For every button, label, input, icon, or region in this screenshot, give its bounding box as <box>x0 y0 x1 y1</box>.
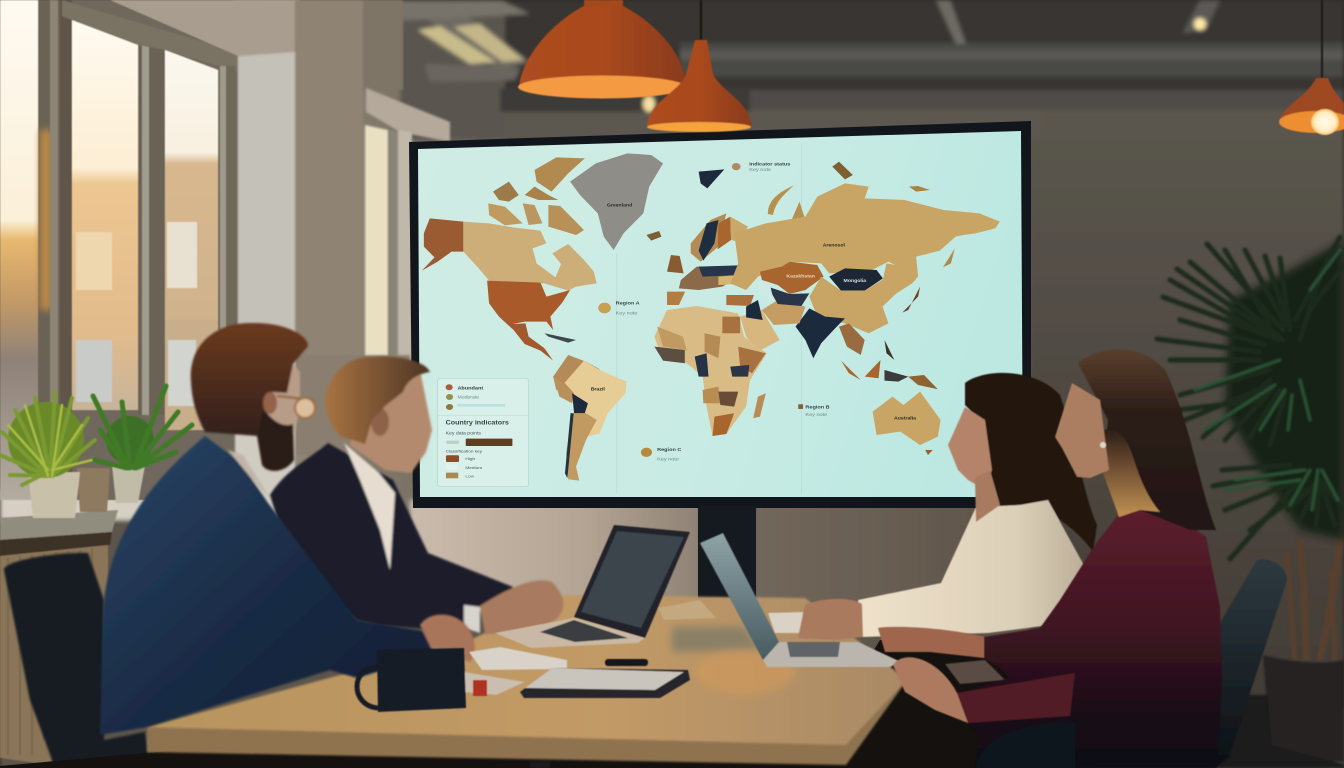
notebook <box>520 668 690 698</box>
hand: lower <box>893 657 968 723</box>
face <box>262 355 300 440</box>
lamp: large centre <box>518 0 686 98</box>
cream pot front <box>28 472 80 518</box>
woman with maroon sweater <box>878 349 1222 768</box>
display bezel <box>409 121 1031 508</box>
hair: blond lower strands <box>1103 429 1160 517</box>
table front edge <box>147 680 907 765</box>
screen <box>418 131 1023 497</box>
Greenland <box>570 153 663 250</box>
hair <box>191 323 308 436</box>
ceiling and ducts <box>302 0 1344 140</box>
document under mug <box>464 672 525 695</box>
coffee mug <box>357 648 466 712</box>
navy jacket <box>100 436 433 735</box>
pendant lamps <box>518 0 1344 135</box>
legend panel: Abundant <box>457 386 484 391</box>
window sill <box>0 510 118 540</box>
map callouts: Key note <box>657 457 679 462</box>
map callouts: Region A <box>616 301 640 306</box>
plant: large left <box>0 392 95 485</box>
ear <box>263 392 277 414</box>
lamp: small centre <box>647 0 752 132</box>
floor <box>1215 695 1344 768</box>
radiator <box>0 545 108 765</box>
pen <box>473 680 487 696</box>
left chair <box>4 553 150 768</box>
earring <box>1100 442 1106 448</box>
maroon sweater <box>957 510 1222 768</box>
Australia <box>873 392 941 445</box>
legend panel: Low <box>465 474 475 478</box>
face <box>948 407 992 490</box>
hair <box>1078 349 1216 530</box>
blouse lower <box>945 660 1005 684</box>
large wall display with world map <box>409 121 1031 598</box>
woman with cream blouse <box>798 373 1097 684</box>
blouse <box>858 500 1085 637</box>
South America <box>553 355 627 481</box>
map callouts: Key note <box>616 311 638 316</box>
cream pot back <box>112 466 145 503</box>
left laptop <box>495 525 690 648</box>
right laptop <box>700 533 901 667</box>
plant trunks <box>1287 540 1340 660</box>
legend panel: Key data points <box>446 431 482 436</box>
dark jacket <box>270 443 513 632</box>
face <box>1055 383 1109 478</box>
hand: upper <box>878 627 984 658</box>
person in dark suit with white shirt <box>270 357 563 634</box>
tan pot <box>77 468 110 512</box>
papers <box>469 647 567 670</box>
Europe <box>667 213 754 306</box>
phone <box>605 659 648 666</box>
map callouts: Indicator status <box>749 162 791 167</box>
sweater lower arm <box>957 673 1075 723</box>
map labels: Brazil <box>591 387 605 392</box>
map callouts: Key note <box>749 167 771 173</box>
map callouts <box>598 162 830 462</box>
white shirt <box>344 443 395 570</box>
hair <box>965 373 1097 552</box>
lamp: right with bulb <box>1279 0 1344 135</box>
map callouts: Region C <box>657 447 682 453</box>
map callouts: Key note <box>805 412 827 418</box>
white collar <box>228 450 270 498</box>
legend panel: Moderate <box>457 395 480 400</box>
woven plant pot <box>1263 655 1344 762</box>
left window <box>0 0 300 500</box>
paper near laptop <box>768 612 806 633</box>
chair arm <box>976 722 1075 768</box>
map labels: Greenland <box>607 203 632 208</box>
right potted plant <box>1157 237 1344 768</box>
table top <box>147 595 907 745</box>
hands <box>480 580 563 634</box>
Russia and Asia <box>730 183 1000 389</box>
Africa <box>654 306 767 436</box>
world map <box>422 143 1000 493</box>
map labels <box>591 203 916 421</box>
North America <box>422 157 597 361</box>
meeting table <box>147 595 907 768</box>
map labels: Kazakhstan <box>786 274 815 279</box>
legend panel: Medium <box>465 465 483 470</box>
legend panel: Classification key <box>446 449 483 453</box>
display stand <box>698 506 756 598</box>
ear <box>371 408 389 436</box>
hands <box>798 599 863 640</box>
map callouts: Region B <box>805 405 830 410</box>
legend panel <box>438 378 529 487</box>
laptops and desk items <box>357 525 901 712</box>
glasses <box>277 396 315 418</box>
under table shadow <box>0 640 1100 768</box>
palm leaves <box>1157 237 1344 559</box>
hand <box>420 614 475 662</box>
plant: small left <box>93 386 192 468</box>
map labels: Australia <box>894 416 916 421</box>
map labels: Mongolia <box>844 278 866 284</box>
map labels: Arenosol <box>823 243 845 248</box>
left plants and window sill <box>0 386 192 765</box>
wall column and second window <box>235 0 450 500</box>
legend panel: High <box>465 456 476 461</box>
neck <box>975 470 1000 522</box>
right chair <box>1100 559 1287 768</box>
papers under laptop <box>658 600 716 620</box>
shirt cuff <box>464 605 480 633</box>
face <box>350 370 432 473</box>
person in navy suit and glasses <box>100 323 475 735</box>
beard <box>256 403 294 471</box>
legend panel: Country indicators <box>446 420 509 426</box>
hair <box>325 357 430 444</box>
window panes <box>0 0 220 500</box>
